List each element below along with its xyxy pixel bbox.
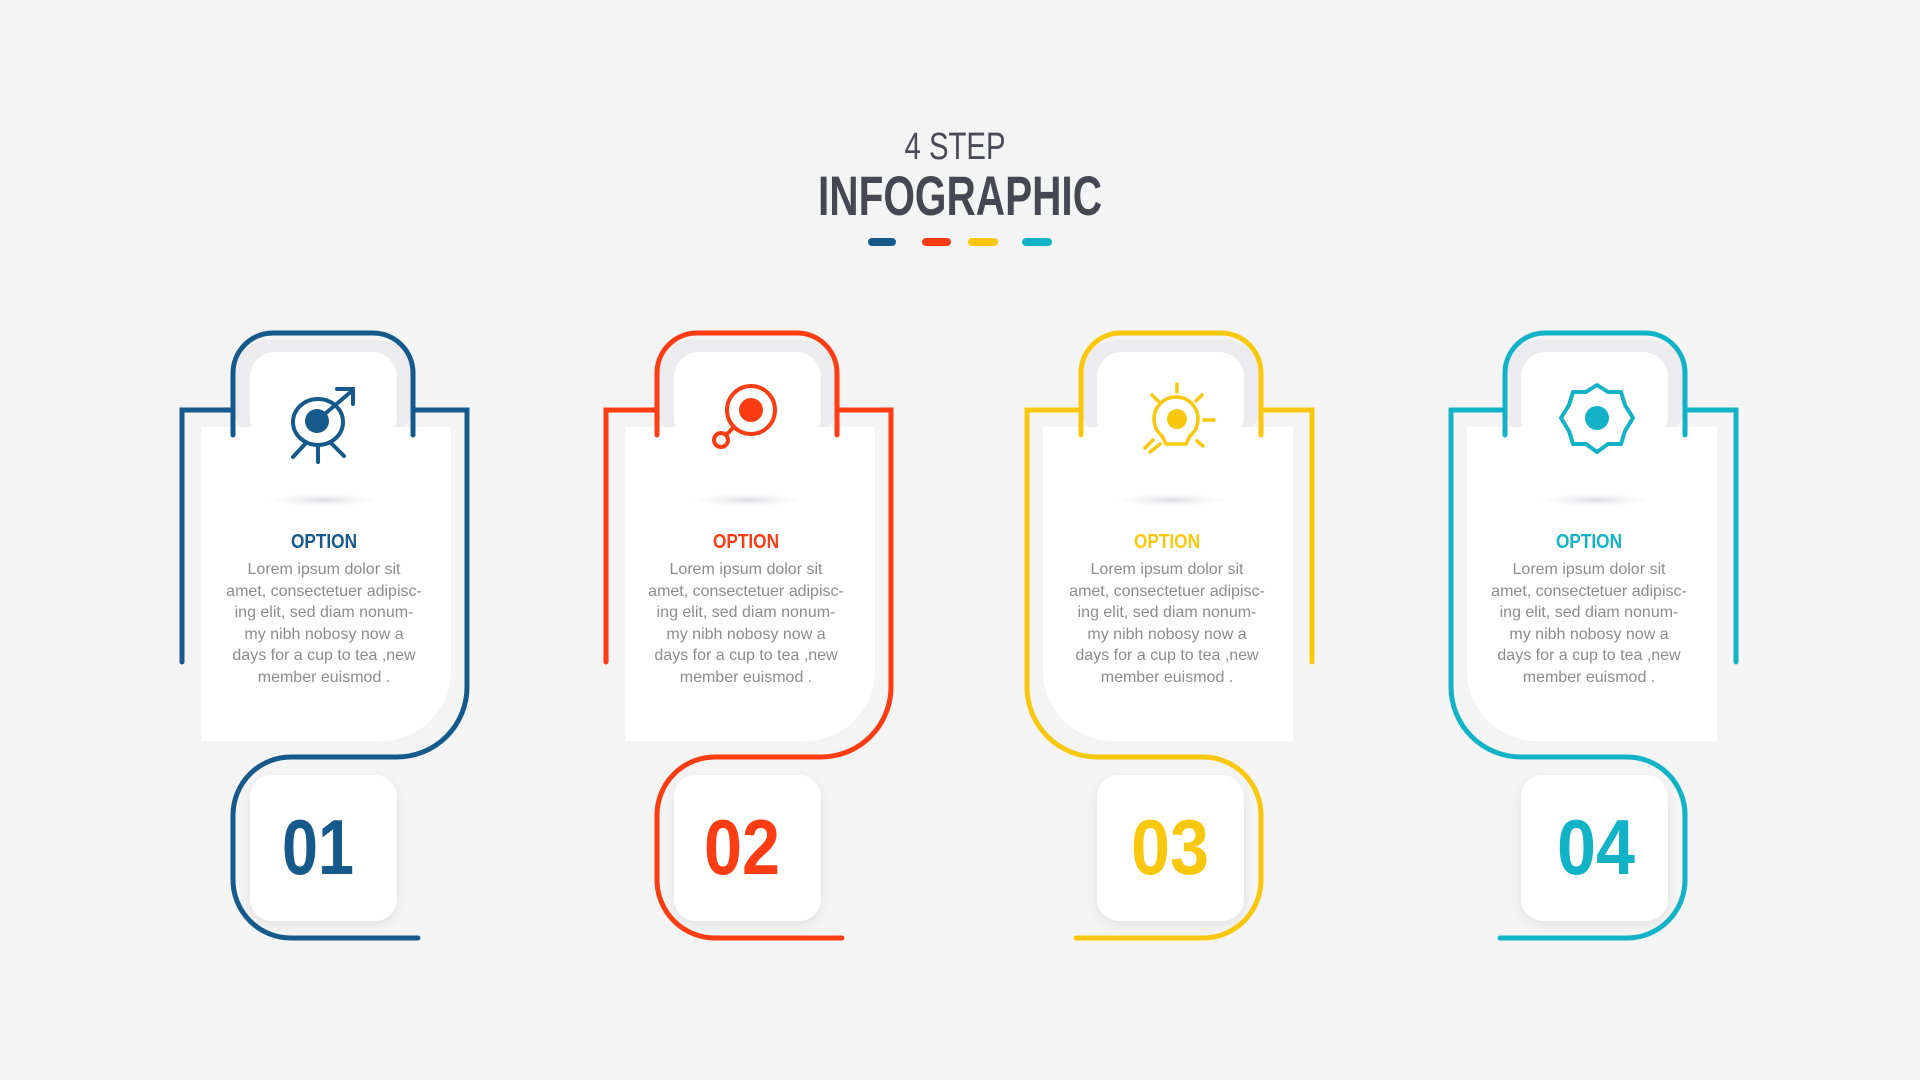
text: option 3: ing elit, sed diam nonum-	[1078, 604, 1256, 621]
text: option 4: OPTION	[1556, 531, 1622, 553]
panel 4	[1451, 333, 1736, 938]
panel 1	[182, 333, 467, 938]
icon: magnifier	[714, 386, 775, 447]
text: option 3: my nibh nobosy now a	[1087, 626, 1247, 643]
text: option 2: Lorem ipsum dolor sit	[670, 561, 823, 578]
text: option 3: member euismod .	[1101, 669, 1233, 686]
panel 2	[606, 333, 891, 938]
text: option 1: amet, consectetuer adipisc-	[226, 583, 422, 600]
text: option 3: OPTION	[1134, 531, 1200, 553]
text: option 4: days for a cup to tea ,new	[1497, 647, 1681, 664]
title	[818, 126, 1102, 227]
text: option 1: days for a cup to tea ,new	[232, 647, 416, 664]
text: option 1: my nibh nobosy now a	[244, 626, 404, 643]
title: INFOGRAPHIC	[818, 164, 1102, 227]
text: option 4: my nibh nobosy now a	[1509, 626, 1669, 643]
text: option 1	[226, 531, 422, 686]
number 01: 01	[282, 803, 354, 891]
text: option 2	[648, 531, 844, 686]
number 02: 02	[704, 803, 780, 891]
icon: lightbulb	[1145, 384, 1214, 452]
text: option 1: OPTION	[291, 531, 357, 553]
text: option 2: days for a cup to tea ,new	[654, 647, 838, 664]
title: 4 STEP	[904, 126, 1006, 168]
text: option 1: Lorem ipsum dolor sit	[248, 561, 401, 578]
panel 3	[1027, 333, 1312, 938]
text: option 3	[1069, 531, 1265, 686]
text: option 4: member euismod .	[1523, 669, 1655, 686]
text: option 4: ing elit, sed diam nonum-	[1500, 604, 1678, 621]
text: option 2: amet, consectetuer adipisc-	[648, 583, 844, 600]
text: option 2: my nibh nobosy now a	[666, 626, 826, 643]
text: option 2: OPTION	[713, 531, 779, 553]
icon: gear badge	[1561, 385, 1633, 452]
number 04: 04	[1557, 803, 1635, 891]
text: option 1: ing elit, sed diam nonum-	[235, 604, 413, 621]
text: option 3: days for a cup to tea ,new	[1075, 647, 1259, 664]
text: option 3: Lorem ipsum dolor sit	[1091, 561, 1244, 578]
text: option 2: ing elit, sed diam nonum-	[657, 604, 835, 621]
text: option 4: amet, consectetuer adipisc-	[1491, 583, 1687, 600]
text: option 1: member euismod .	[258, 669, 390, 686]
number 03: 03	[1131, 803, 1209, 891]
text: option 4	[1491, 531, 1687, 686]
color dashes	[872, 238, 1048, 246]
icon: target with arrow	[293, 389, 353, 462]
text: option 3: amet, consectetuer adipisc-	[1069, 583, 1265, 600]
text: option 2: member euismod .	[680, 669, 812, 686]
text: option 4: Lorem ipsum dolor sit	[1513, 561, 1666, 578]
